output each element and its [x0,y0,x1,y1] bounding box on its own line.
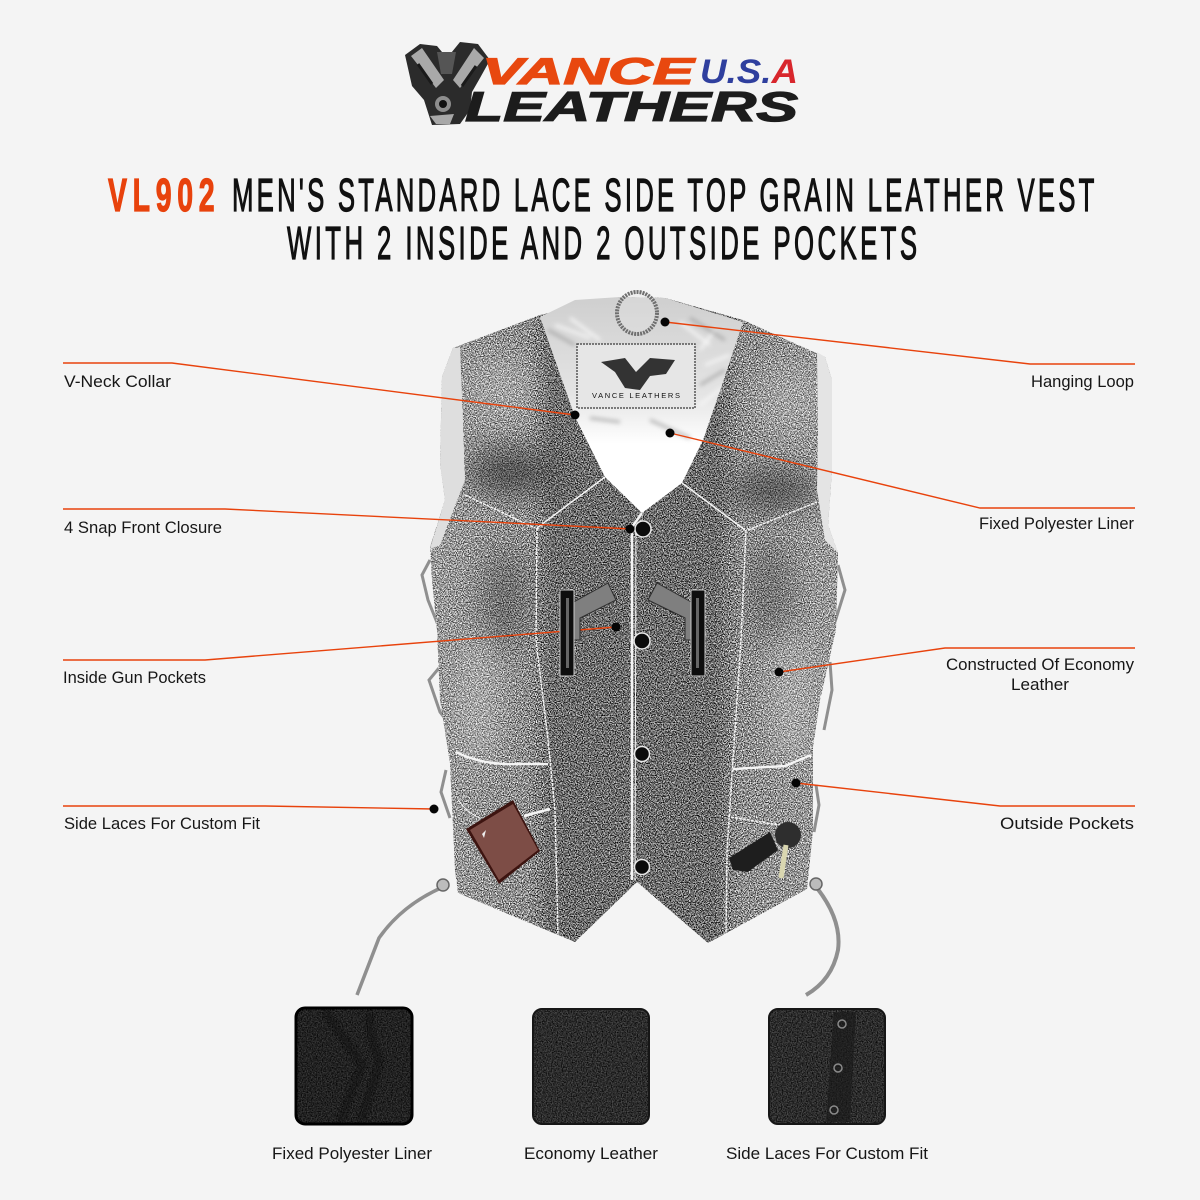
armhole facings [430,347,465,549]
icon: left pistol [560,583,616,676]
polyester liner [540,297,743,513]
seams and stitching [456,477,817,935]
hanging loop [617,292,657,334]
label: side laces: Side Laces For Custom Fit [64,814,260,833]
front snaps [634,521,651,874]
swatch caption: Side Laces For Custom Fit [726,1144,928,1163]
title: line two: WITH 2 INSIDE AND 2 OUTSIDE POCKETS [287,217,917,269]
icon: V-twin engine [405,42,490,125]
label: hanging loop: Hanging Loop [1031,372,1134,391]
swatch: side laces [726,1009,928,1163]
logo wordmark: VANCE: VANCE [482,51,696,92]
label: V-neck collar: V-Neck Collar [64,372,171,391]
label: polyester liner: Fixed Polyester Liner [979,514,1134,533]
vest body [430,297,838,943]
liner folds [555,318,730,405]
label: economy leather: Constructed Of Economy [946,655,1134,674]
label: snap closure: 4 Snap Front Closure [64,518,222,537]
label: economy leather [946,655,1134,694]
callout labels [63,372,1134,833]
icon: car keys [729,822,801,878]
logo: Vance Leathers USA [405,42,798,130]
title: line one: MEN'S STANDARD LACE SIDE TOP GRAIN LEATHER VEST [232,169,1094,221]
swatch: fixed polyester liner [272,1008,432,1163]
icon: brown wallet [466,800,540,884]
vest illustration [357,292,845,995]
vest shading [458,354,820,770]
side laces and tails [357,560,845,995]
logo wordmark: U.S.A: U.S.A [700,53,798,91]
label: economy leather: Leather [1011,675,1069,694]
icon: right pistol [648,583,705,676]
callout dots [430,318,800,814]
swatch caption: Fixed Polyester Liner [272,1144,432,1163]
callout lines [63,322,1135,809]
title: product code: VL902 [108,170,215,222]
label: gun pockets: Inside Gun Pockets [63,668,206,687]
swatch: economy leather [524,1009,658,1163]
title [108,169,1094,269]
label text: VANCE LEATHERS [592,391,680,400]
swatch caption: Economy Leather [524,1144,658,1163]
logo wordmark: LEATHERS: LEATHERS [465,83,798,130]
label: outside pockets: Outside Pockets [1000,814,1134,833]
label emblem [601,358,675,390]
brand label patch [577,344,695,408]
liner shadow folds [548,318,725,438]
